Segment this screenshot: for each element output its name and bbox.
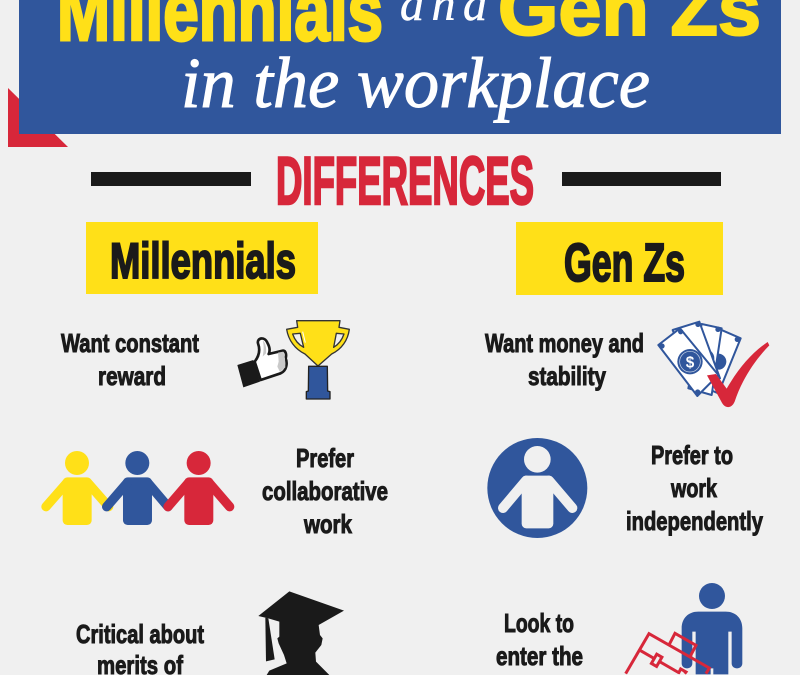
text: prefer collaborative work: work [303,509,352,539]
person: red [168,451,230,525]
briefcase [626,633,709,674]
icon: single person in circle [487,438,587,538]
person [682,583,742,674]
text: look to enter the: enter the [496,641,583,671]
column header: Millennials [86,222,318,294]
text: want constant reward [61,328,199,391]
text: look to enter the [496,608,583,671]
text: critical about merits of: Critical about [76,619,204,649]
icon: money with check mark [658,322,769,407]
column header: Gen Zs [516,222,723,295]
icon: money with check mark: $ [686,354,695,371]
text: look to enter the: Look to [504,608,574,638]
text: want money and stability: stability [528,361,606,391]
person: yellow [46,451,109,525]
icon: thumbs up [237,338,287,387]
decorative red corner triangle [8,88,68,147]
heading: differences: DIFFERENCES [276,143,534,219]
icon: three people holding hands [46,451,230,525]
text: want money and stability: Want money and [485,328,644,358]
text: prefer to work independently: independently [626,506,763,536]
text: want constant reward: Want constant [61,328,199,358]
text: want constant reward: reward [98,361,166,391]
person: blue [107,451,168,525]
text: critical about merits of [76,619,204,675]
subtitle: in the workplace: in the workplace [181,43,650,123]
icon: graduate silhouette [258,591,344,675]
title banner [19,0,781,134]
text: prefer collaborative work [262,443,388,539]
column header: Gen Zs: Gen Zs [564,233,685,293]
text: prefer collaborative work: collaborative [262,476,388,506]
heading: differences [91,143,721,219]
icon: trophy [287,321,349,399]
text: prefer to work independently: Prefer to [651,440,733,470]
text: prefer to work independently: work [670,473,717,503]
text: prefer to work independently [626,440,763,536]
text: prefer collaborative work: Prefer [296,443,354,473]
text: want money and stability [485,328,644,391]
column header: Millennials: Millennials [110,233,296,289]
icon: person with briefcase [626,583,742,674]
